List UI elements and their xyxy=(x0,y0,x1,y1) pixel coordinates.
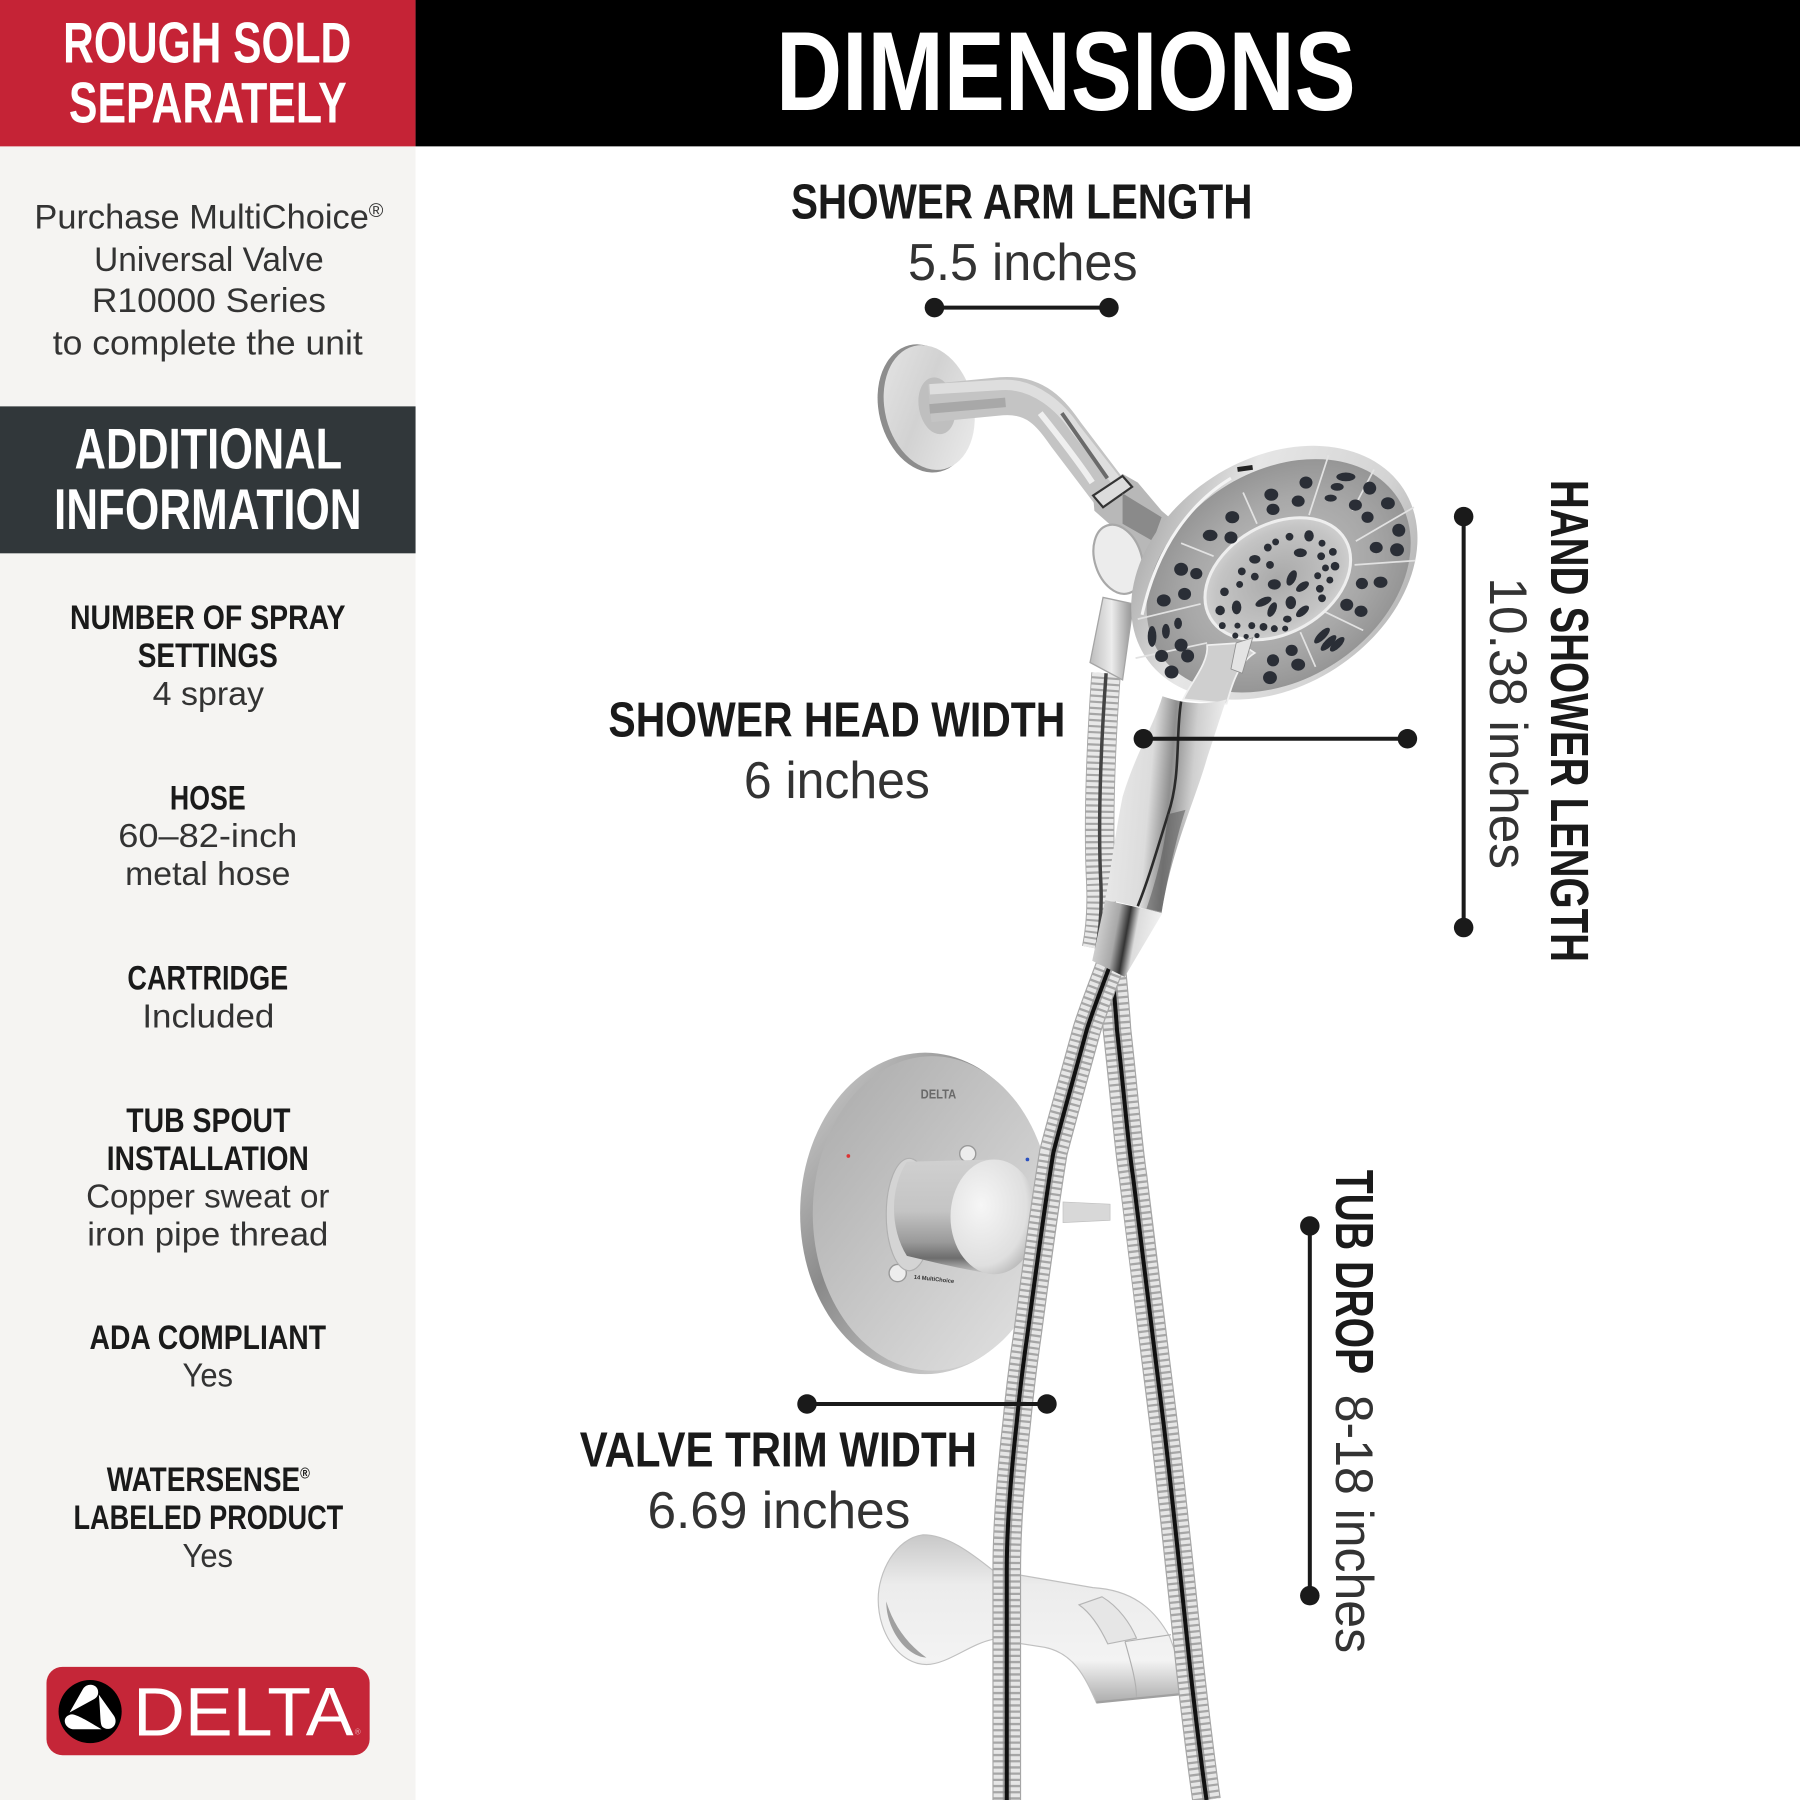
handle collar xyxy=(1092,900,1162,977)
product: tub spout xyxy=(878,1535,1190,1702)
heading: additional information: INFORMATION xyxy=(54,478,362,542)
spec: number of spray settings: NUMBER OF SPRAY xyxy=(70,599,346,637)
spec: watersense labeled product: ® xyxy=(300,1465,310,1483)
spec: ada compliant: ADA COMPLIANT xyxy=(90,1319,326,1357)
text block: purchase note: Purchase MultiChoice xyxy=(34,198,364,236)
shower head rim xyxy=(1083,394,1465,752)
dimension: tub drop: TUB DROP xyxy=(1324,1170,1384,1374)
dimension: hand shower length: 10.38 inches xyxy=(1478,577,1537,869)
spec: ada compliant xyxy=(90,1319,326,1395)
panel: rough sold separately banner: ROUGH SOLD xyxy=(63,12,351,76)
spec: tub spout installation: iron pipe thread xyxy=(87,1217,328,1254)
spec: number of spray settings: SETTINGS xyxy=(138,637,278,675)
inner spray disc xyxy=(1183,493,1372,665)
dimension: shower head width: 6 inches xyxy=(744,751,930,809)
product: overflow tab xyxy=(1063,1202,1110,1223)
upper hose loop xyxy=(1097,673,1106,949)
panel: rough sold separately banner: SEPARATELY xyxy=(69,71,347,135)
wall flange xyxy=(865,334,987,483)
heading: additional information: ADDITIONAL xyxy=(75,417,342,481)
hose holder xyxy=(1090,597,1133,680)
dimension: shower arm length xyxy=(791,175,1252,317)
logo: delta xyxy=(46,1667,370,1755)
product: valve trim plate xyxy=(800,1053,1052,1374)
handle neck xyxy=(1183,643,1255,704)
dimension: valve trim width: 6.69 inches xyxy=(647,1481,910,1539)
title: dimensions xyxy=(416,0,1800,146)
shower arm xyxy=(930,385,1123,498)
dimension: shower arm length: SHOWER ARM LENGTH xyxy=(791,175,1252,230)
sidebar background xyxy=(0,0,416,1800)
spec: cartridge: CARTRIDGE xyxy=(127,960,288,998)
spray nozzles xyxy=(1148,473,1405,684)
panel: rough sold separately banner xyxy=(0,0,416,146)
logo: delta: DELTA xyxy=(133,1674,354,1751)
spec: hose: HOSE xyxy=(170,779,246,817)
text block: purchase note: Universal Valve xyxy=(94,241,324,279)
product: long hose left strand xyxy=(1007,962,1111,1800)
spec: hose xyxy=(118,779,297,893)
shower head face xyxy=(1103,411,1455,740)
dimension: valve trim width xyxy=(580,1394,1057,1539)
dimension: shower head width: SHOWER HEAD WIDTH xyxy=(608,692,1065,747)
product: valve trim plate: 14 MultiChoice xyxy=(914,1275,954,1285)
dimension: shower head width xyxy=(608,692,1417,809)
spec: ada compliant: Yes xyxy=(183,1358,233,1395)
text block: purchase note xyxy=(34,198,384,363)
spec: cartridge xyxy=(127,960,288,1035)
spec: number of spray settings: 4 spray xyxy=(153,676,264,713)
spray selector button xyxy=(1231,638,1253,673)
text block: purchase note: ® xyxy=(369,200,384,222)
product: long hose right strand xyxy=(1111,962,1207,1800)
dimension: valve trim width: VALVE TRIM WIDTH xyxy=(580,1423,977,1478)
dimension: hand shower length: HAND SHOWER LENGTH xyxy=(1539,480,1599,962)
spec: tub spout installation: TUB SPOUT xyxy=(126,1102,291,1140)
logo: delta: ® xyxy=(355,1728,361,1737)
spec: watersense labeled product: LABELED PRODUCT xyxy=(73,1499,343,1537)
spec: watersense labeled product: WATERSENSE xyxy=(107,1461,341,1499)
spec: watersense labeled product xyxy=(73,1461,343,1575)
valve logo text: DELTA xyxy=(921,1088,956,1102)
title: dimensions: DIMENSIONS xyxy=(776,8,1356,134)
spec: cartridge: Included xyxy=(142,998,274,1035)
spec: number of spray settings xyxy=(70,599,346,713)
arm connector xyxy=(1093,474,1177,563)
text block: purchase note: to complete the unit xyxy=(53,325,363,363)
spec: watersense labeled product: Yes xyxy=(183,1538,233,1575)
spec: hose: metal hose xyxy=(125,856,290,893)
spec: tub spout installation: INSTALLATION xyxy=(107,1140,309,1178)
spec: hose: 60–82-inch xyxy=(118,818,297,855)
holder ball joint xyxy=(1085,518,1151,600)
dimension: tub drop xyxy=(1300,1170,1384,1653)
dimension: hand shower length xyxy=(1454,480,1599,962)
dimension: tub drop: 8-18 inches xyxy=(1324,1395,1383,1653)
hand shower handle xyxy=(1105,696,1227,913)
dimension: shower arm length: 5.5 inches xyxy=(908,233,1138,291)
text block: purchase note: R10000 Series xyxy=(92,282,326,320)
spec: tub spout installation xyxy=(86,1102,329,1254)
product: shower assembly xyxy=(865,334,1465,977)
spec: tub spout installation: Copper sweat or xyxy=(86,1179,329,1216)
heading: additional information xyxy=(0,406,416,553)
